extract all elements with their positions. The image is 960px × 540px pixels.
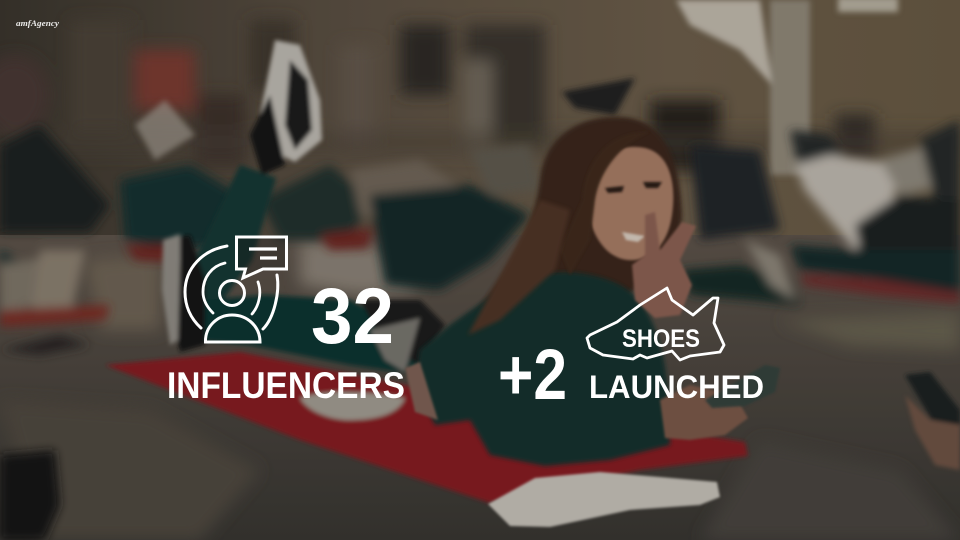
pony strands bbox=[468, 200, 570, 335]
inner signal arcs bbox=[203, 263, 260, 314]
foreground phone and hand at right edge bbox=[905, 372, 960, 470]
speech bubble bbox=[236, 237, 286, 278]
number: 32: 32 bbox=[311, 271, 394, 360]
bare lower back bbox=[405, 362, 438, 420]
icon: influencer with speech bubble bbox=[185, 237, 286, 342]
peace sign hand bbox=[632, 212, 696, 318]
shoulders bbox=[205, 315, 260, 342]
label: INFLUENCERS: INFLUENCERS bbox=[167, 365, 405, 406]
floor highlights bbox=[0, 240, 960, 540]
icon: shoe outline bbox=[587, 288, 724, 360]
eyes and smile bbox=[605, 182, 662, 242]
speech lines bbox=[249, 249, 277, 258]
hair back bbox=[470, 117, 682, 335]
phone bbox=[705, 365, 780, 408]
red exercise mat bbox=[105, 352, 748, 503]
sweater bbox=[415, 272, 670, 466]
girl bbox=[405, 117, 780, 466]
mat logo bbox=[300, 392, 405, 420]
label: SHOES: SHOES bbox=[622, 325, 700, 353]
girl's raised leg and shoes bbox=[162, 40, 445, 375]
background crowd bbox=[0, 120, 960, 540]
face bbox=[587, 147, 673, 260]
white towel bbox=[488, 472, 720, 527]
logo: amfAgency bbox=[16, 19, 60, 28]
number: +2: +2 bbox=[498, 336, 567, 415]
forearm and hand on phone bbox=[660, 385, 748, 440]
head bbox=[220, 280, 244, 306]
label: LAUNCHED: LAUNCHED bbox=[589, 369, 764, 405]
outer signal arcs bbox=[185, 246, 278, 329]
hair front bbox=[560, 132, 650, 275]
